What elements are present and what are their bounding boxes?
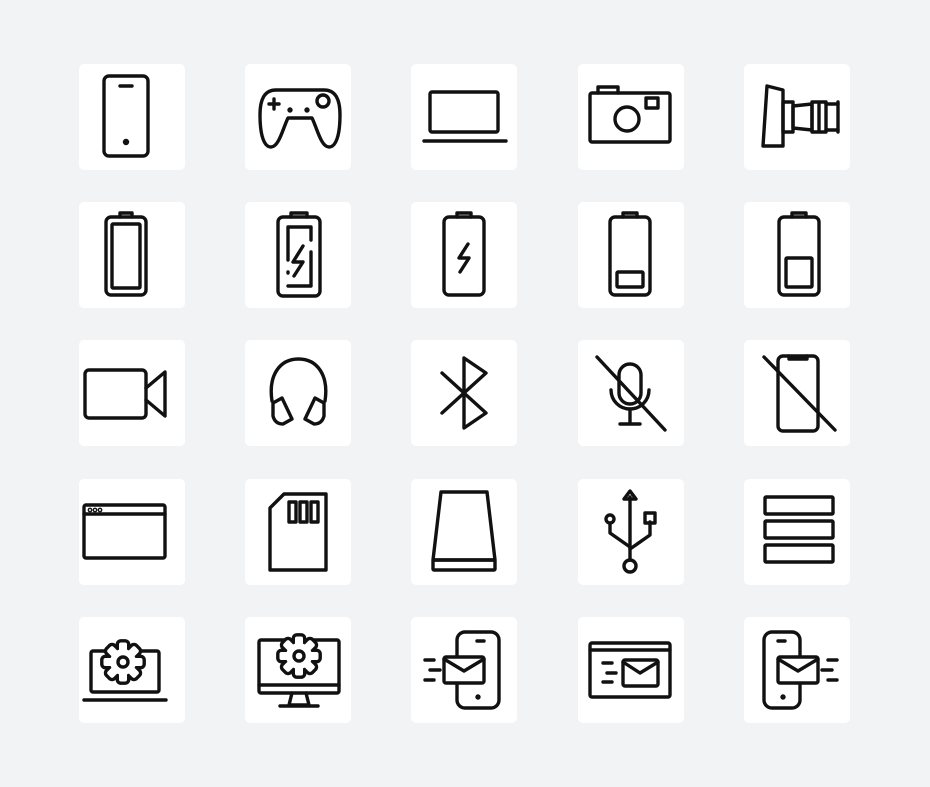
icon: laptop bbox=[424, 92, 506, 141]
icon: video camera bbox=[85, 370, 165, 418]
icon: phone mail outgoing bbox=[425, 632, 499, 708]
icon: headphones bbox=[271, 359, 326, 424]
icon: bluetooth bbox=[442, 358, 486, 428]
icon: smartphone bbox=[104, 76, 148, 156]
icon: phone off bbox=[764, 356, 835, 431]
icon: server bbox=[765, 497, 833, 562]
icon: monitor gear bbox=[259, 636, 339, 706]
icon: hard drive bbox=[433, 492, 495, 570]
icon: battery bolt bbox=[444, 213, 484, 295]
icon: usb bbox=[606, 491, 655, 572]
icon: laptop gear bbox=[84, 642, 166, 700]
icon: browser window bbox=[84, 505, 165, 558]
icon: battery half bbox=[779, 213, 819, 295]
icon: browser mail bbox=[590, 643, 670, 697]
icon: battery low bbox=[610, 213, 650, 295]
icon: camera bbox=[590, 87, 670, 142]
icon: gamepad bbox=[260, 90, 340, 147]
icon: microphone off bbox=[597, 357, 665, 430]
icon: spyglass bbox=[763, 86, 838, 146]
icon: SD card bbox=[270, 494, 326, 570]
icon: battery charging bbox=[278, 213, 320, 296]
icon: battery empty bbox=[106, 213, 146, 295]
icon: phone mail incoming bbox=[764, 632, 837, 708]
